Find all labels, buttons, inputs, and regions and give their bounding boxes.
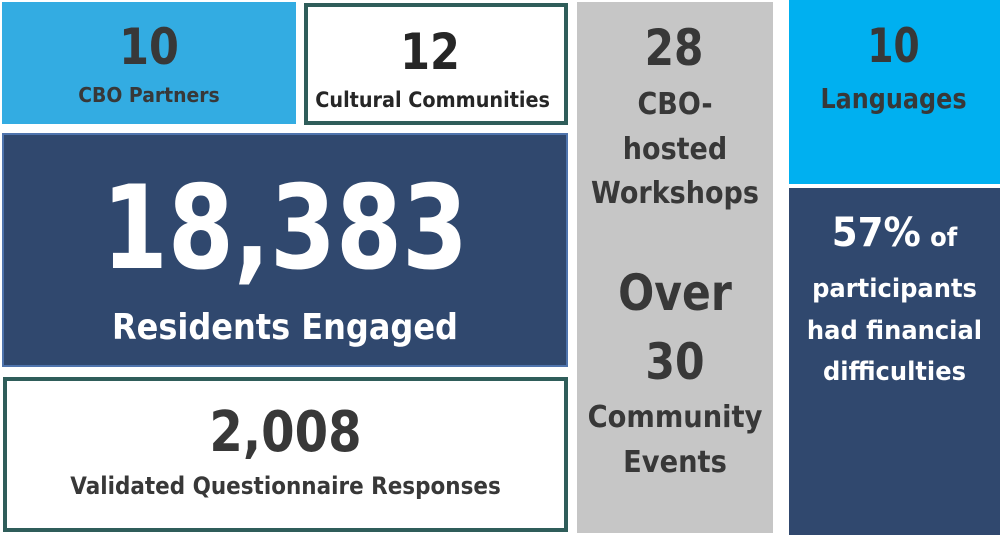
number: 28: 28 xyxy=(645,19,703,77)
label: Languages: Languages xyxy=(820,82,967,115)
label: CBO-hosted Workshops: Workshops xyxy=(591,176,759,211)
label: CBO Partners: CBO Partners xyxy=(78,83,220,107)
label: Community Events: Community xyxy=(588,400,762,435)
label: Cultural Communities: Cultural Communities xyxy=(315,88,550,112)
number: 10 CBO partners: 10 xyxy=(119,18,179,76)
number: 2,008: 2,008 xyxy=(209,400,362,465)
statistic: 57% of participants had financial difficulties xyxy=(807,210,982,387)
label: Validated Questionnaire Responses: Validated Questionnaire Responses xyxy=(70,472,501,500)
statistic: 57% of participants had financial difficulties: 57% of xyxy=(832,210,957,256)
label: CBO-hosted Workshops: CBO- xyxy=(637,87,713,122)
label: Community Events xyxy=(588,400,762,480)
statistic: 57% of participants had financial difficulties: had financial xyxy=(807,316,982,346)
panel: CBO partners xyxy=(2,2,296,124)
number: 10 languages: 10 xyxy=(867,19,920,74)
label: CBO-hosted Workshops: hosted xyxy=(623,132,727,166)
panel: residents engaged xyxy=(2,133,568,367)
label: CBO-hosted Workshops xyxy=(591,87,759,211)
panel: cultural communities xyxy=(304,3,568,125)
statistic: 57% of participants had financial difficulties: participants xyxy=(812,274,977,304)
panel: languages xyxy=(789,0,1000,184)
number: Over 30 xyxy=(618,264,732,391)
label: Community Events: Events xyxy=(623,445,727,480)
panel: financial difficulties xyxy=(789,188,1000,535)
number: 18,383: 18,383 xyxy=(102,161,468,296)
panel: workshops and events xyxy=(577,2,773,533)
number: 12 cultural communities: 12 xyxy=(400,23,460,81)
statistic: 57% of participants had financial difficulties: difficulties xyxy=(823,357,966,387)
number: Over 30: 30 xyxy=(645,333,705,391)
label: Residents Engaged: Residents Engaged xyxy=(112,307,458,348)
number: Over 30: Over xyxy=(618,264,732,322)
panel: questionnaire responses xyxy=(3,377,568,532)
